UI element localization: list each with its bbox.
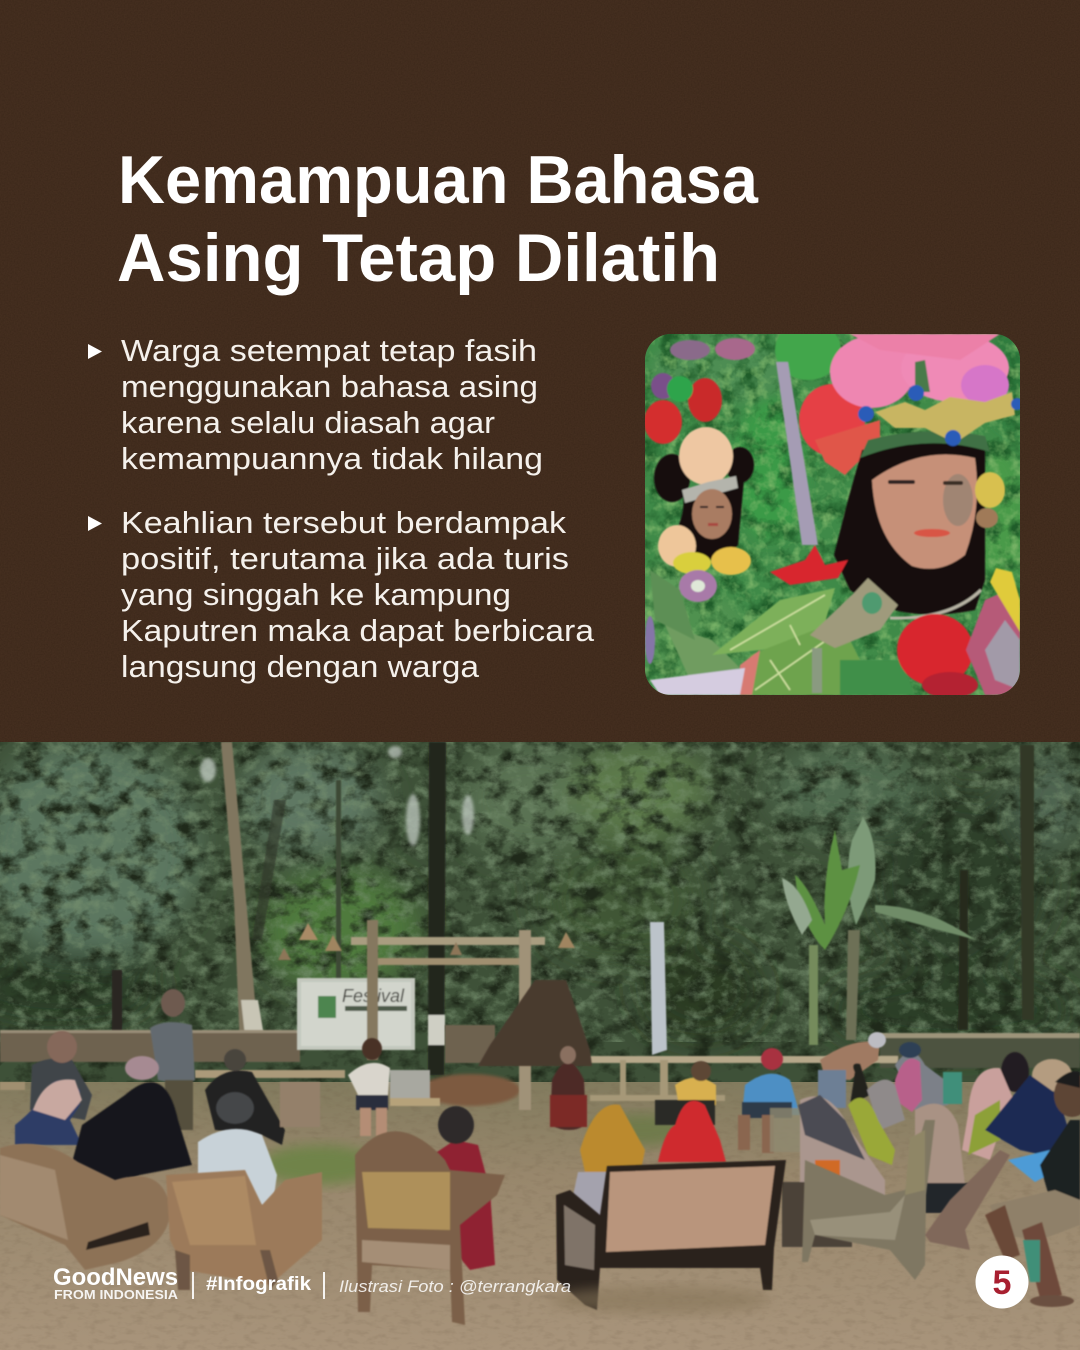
woman pink hijab navy top: [15, 1079, 82, 1145]
hashtag: #Infografik: [206, 1274, 311, 1295]
forest backdrop: [0, 740, 1080, 1092]
man yellow shirt: [655, 1061, 716, 1125]
man with cap foreground: [1040, 1120, 1080, 1200]
costume flowers left: [658, 525, 696, 567]
necklace: [890, 590, 981, 618]
bullet item: positive impact for tourists: langsung dengan warga: [121, 649, 480, 684]
photo: dancers in floral costumes: [640, 320, 1034, 698]
page number badge: 5: [993, 1264, 1011, 1302]
banana plant: [782, 817, 976, 1045]
weathered chair right: [802, 1120, 935, 1280]
wooden sofa left: [0, 1144, 170, 1270]
chairs: [0, 1120, 1010, 1325]
crown band: [860, 431, 990, 458]
second dancer: [654, 454, 690, 502]
fence: [0, 1025, 1080, 1110]
gold crown: [875, 392, 1015, 443]
background: dark brown textured panel: [0, 0, 1080, 742]
photo: villagers gathered in circle in the forest: [0, 740, 1080, 1350]
small flowers top-left: [670, 340, 710, 360]
logo: GoodNews from Indonesia: FROM INDONESIA: [54, 1288, 178, 1302]
pink hijab woman: [962, 1068, 1018, 1160]
woman with hijab floral: [125, 1056, 159, 1080]
signboard and gate: [278, 920, 575, 1110]
hijab women rear: [1032, 1059, 1072, 1091]
face: [872, 454, 977, 569]
page number badge: [976, 1256, 1028, 1308]
large leaf foreground: [712, 588, 835, 655]
tan hijab woman: [915, 1104, 965, 1185]
red hijab woman: [658, 1100, 726, 1162]
man in dark jacket: [30, 1031, 92, 1120]
bullet item: fluent in foreign languages: menggunakan bahasa asing: [121, 369, 538, 404]
woman seated far: [550, 1046, 587, 1130]
seated people background left: [30, 989, 886, 1153]
bullet item: positive impact for tourists: positif, terutama jika ada turis: [121, 541, 569, 576]
footer bar: [53, 1264, 571, 1302]
bullet item: positive impact for tourists: Keahlian tersebut berdampak: [121, 505, 567, 540]
red feather flower: [770, 545, 848, 585]
signboard and gate: Festival: [342, 986, 405, 1006]
standing man: [150, 989, 195, 1130]
woman with camera: [348, 1038, 390, 1136]
bullet list: [88, 333, 595, 684]
man bending striped shirt: [818, 1032, 886, 1108]
brooch: [810, 578, 898, 648]
bullet item: fluent in foreign languages: karena selalu diasah agar: [121, 405, 495, 440]
crowd right side: [782, 1042, 1080, 1307]
green ball: [774, 334, 842, 380]
title: Kemampuan Bahasa: [118, 142, 759, 218]
woman red dress with braid: [385, 1106, 495, 1270]
bullet item: fluent in foreign languages: [88, 333, 543, 476]
bullet item: positive impact for tourists: Kaputren maka dapat berbicara: [121, 613, 595, 648]
striped hijab woman: [800, 1096, 885, 1210]
bullet item: fluent in foreign languages: kemampuannya tidak hilang: [121, 441, 543, 476]
small flower right: [975, 472, 1005, 508]
navy hijab woman: [985, 1075, 1070, 1160]
pink costume panel: [966, 590, 1020, 695]
chair far right: [925, 1150, 1010, 1250]
bullet item: positive impact for tourists: yang singgah ke kampung: [121, 577, 511, 612]
black hijab: [834, 440, 985, 614]
white banner: [650, 922, 667, 1055]
bullet item: fluent in foreign languages: Warga setempat tetap fasih: [121, 333, 537, 368]
ground shadow: [550, 1286, 770, 1314]
man blue shirt: [738, 1048, 802, 1153]
mustard hijab woman: [570, 1105, 645, 1235]
photo credit: Ilustrasi Foto : @terrangkara: [339, 1277, 571, 1296]
leaves lower-left: [665, 625, 740, 680]
title: [117, 142, 759, 296]
red rose: [897, 614, 973, 686]
headdress flowers: [799, 384, 865, 456]
man white shirt: [198, 1092, 277, 1210]
wooden chair second: [166, 1170, 322, 1290]
tree trunks: [112, 742, 1034, 1075]
bullet item: positive impact for tourists: [88, 505, 595, 684]
person with curly black hair: [70, 1082, 192, 1195]
far chairs: [280, 1082, 320, 1127]
man with cap black shirt: [205, 1049, 285, 1145]
pole: [776, 362, 818, 545]
ground: [0, 1082, 1080, 1350]
white strip bottom-left: [650, 668, 745, 695]
thatched hut: [478, 980, 592, 1066]
foreground people left: [15, 1056, 726, 1270]
wooden chair center back: [355, 1131, 505, 1325]
floral sofa: [556, 1160, 786, 1310]
logo: GoodNews from Indonesia: GoodNews: [53, 1264, 178, 1291]
title: Asing Tetap Dilatih: [117, 220, 720, 296]
